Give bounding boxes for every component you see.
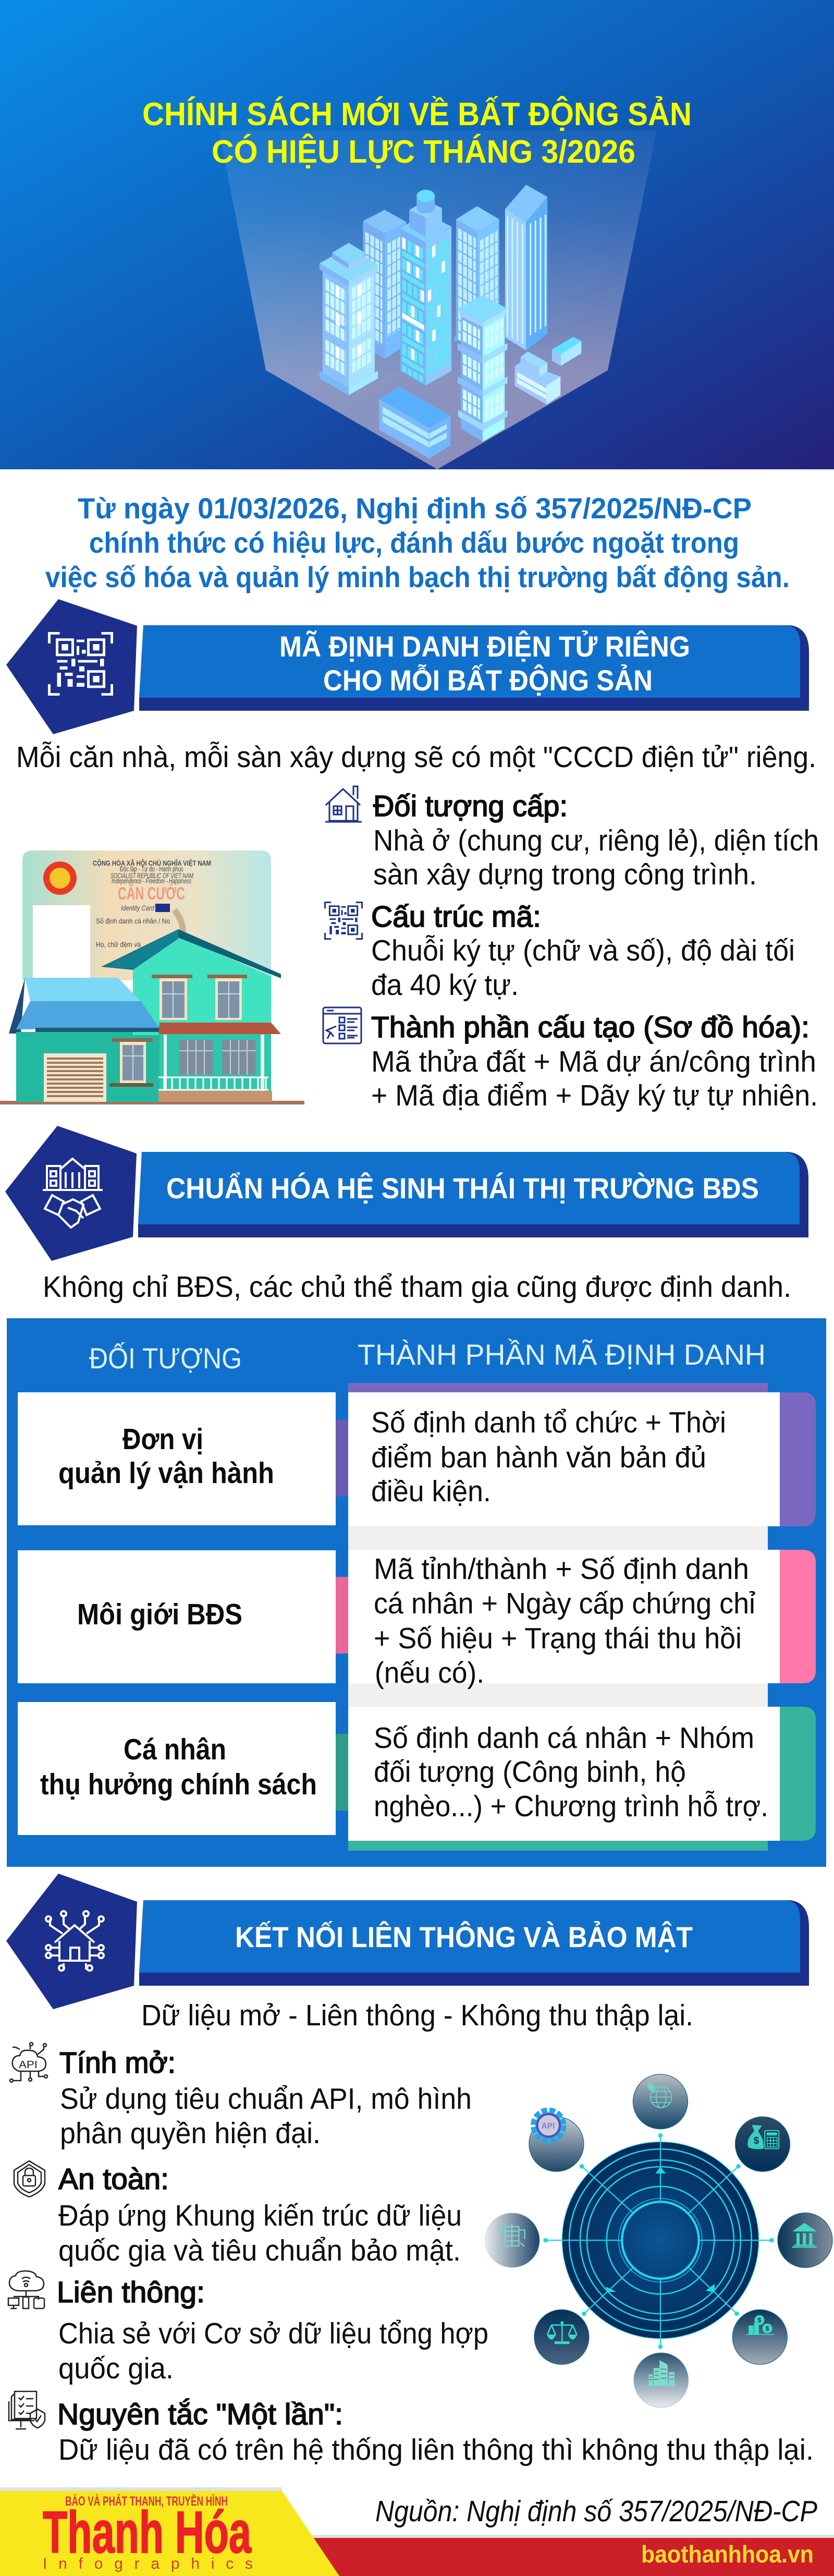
row: Đơn vị quản lý vận hành xyxy=(18,1383,816,1551)
row: Đơn vị quản lý vận hành: Đơn vị xyxy=(122,1423,203,1456)
diagram: data hub network xyxy=(485,2074,832,2408)
low block front xyxy=(379,387,450,458)
item: Nguyên tắc một lần xyxy=(9,2391,814,2466)
icon: API cloud: API xyxy=(19,2059,38,2071)
ID card: Independence - Freedom - Happiness xyxy=(112,877,191,885)
body text: Đáp ứng Khung kiến trúc dữ liệu xyxy=(58,2199,462,2232)
body text: Dữ liệu đã có trên hệ thống liên thông thì không thu thập lại. xyxy=(58,2433,814,2466)
title xyxy=(142,96,692,170)
house xyxy=(0,929,304,1104)
hub circle xyxy=(543,2133,774,2349)
node: money bag and calculator xyxy=(735,2117,790,2171)
section 1 badge xyxy=(6,599,137,734)
row: Cá nhân thụ hưởng chính sách: đối tượng (Công binh, hộ xyxy=(374,1755,686,1789)
item: Liên thông xyxy=(8,2271,488,2385)
node: bank xyxy=(778,2213,832,2268)
ID card: Họ, chữ đệm và xyxy=(96,940,141,949)
item: Đối tượng cấp xyxy=(325,786,819,891)
row: Môi giới BĐS: Mã tỉnh/thành + Số định danh xyxy=(374,1552,749,1586)
tower behind left xyxy=(363,210,407,359)
item: Cấu trúc mã xyxy=(325,900,795,1002)
heading: Liên thông: xyxy=(57,2276,205,2309)
section 1 heading xyxy=(279,630,690,697)
row: Cá nhân thụ hưởng chính sách: nghèo...) + Chương trình hỗ trợ. xyxy=(374,1790,768,1823)
item: Tính mở xyxy=(10,2043,472,2150)
icon: diagram window xyxy=(323,1007,361,1043)
ID card: Số định danh cá nhân / No xyxy=(96,917,170,925)
tower left xyxy=(320,243,378,395)
tower front xyxy=(458,295,508,442)
icon: cloud wifi devices xyxy=(8,2271,44,2308)
body text: đa 40 ký tự. xyxy=(371,968,519,1002)
row: Cá nhân thụ hưởng chính sách xyxy=(18,1702,816,1851)
body text: phân quyền hiện đại. xyxy=(60,2117,321,2150)
heading: Nguyên tắc "Một lần": xyxy=(57,2398,343,2431)
publisher tagline: BÁO VÀ PHÁT THANH, TRUYỀN HÌNH xyxy=(65,2494,228,2509)
section 3 heading: KẾT NỐI LIÊN THÔNG VÀ BẢO MẬT xyxy=(235,1921,693,1953)
table background xyxy=(7,1318,826,1867)
row: Đơn vị quản lý vận hành: điểm ban hành văn bản đủ xyxy=(371,1441,706,1474)
column header: subject: ĐỐI TƯỢNG xyxy=(89,1342,242,1375)
intro text xyxy=(45,492,790,593)
item: Thành phần cấu tạo xyxy=(323,1007,818,1112)
section 2 lead text: Không chỉ BĐS, các chủ thể tham gia cũng được định danh. xyxy=(43,1270,791,1304)
ID card: CỘNG HÒA XÃ HỘI CHỦ NGHĨA VIỆT NAM xyxy=(93,858,211,867)
intro text: Từ ngày 01/03/2026, Nghị định số 357/2025/NĐ-CP xyxy=(78,492,752,525)
row: Môi giới BĐS xyxy=(18,1550,816,1708)
body text: quốc gia và tiêu chuẩn bảo mật. xyxy=(58,2234,461,2267)
icon: building and handshake xyxy=(43,1159,103,1228)
footer red band xyxy=(313,2535,834,2576)
body text: quốc gia. xyxy=(58,2352,174,2385)
row: Môi giới BĐS: (nếu có). xyxy=(375,1656,484,1690)
ID card xyxy=(22,850,271,980)
body text xyxy=(58,2199,462,2267)
row: Môi giới BĐS: Môi giới BĐS xyxy=(77,1598,242,1631)
infographics label: Infographics xyxy=(43,2555,253,2572)
body text: sàn xây dựng trong công trình. xyxy=(373,858,757,891)
ID card: Độc lập - Tự do - Hạnh phúc xyxy=(120,865,183,873)
node: money bag and calculator: $ xyxy=(754,2135,759,2146)
section 1 header xyxy=(6,599,809,734)
icon: QR code xyxy=(49,633,112,695)
body text: + Mã địa điểm + Dãy ký tự tự nhiên. xyxy=(371,1079,818,1112)
tower right of centre xyxy=(454,206,499,350)
hero background xyxy=(0,0,834,469)
section 1 heading: MÃ ĐỊNH DANH ĐIỆN TỬ RIÊNG xyxy=(279,630,690,663)
row: Môi giới BĐS: + Số hiệu + Trạng thái thu hồi xyxy=(374,1622,742,1655)
row: Đơn vị quản lý vận hành: điều kiện. xyxy=(371,1475,491,1508)
body text: Sử dụng tiêu chuẩn API, mô hình xyxy=(60,2082,472,2116)
ID card: CĂN CƯỚC xyxy=(118,884,185,904)
publisher logo name: Thanh Hóa xyxy=(43,2499,252,2565)
node: globe xyxy=(633,2074,688,2129)
node: city xyxy=(634,2353,689,2408)
hero panel xyxy=(0,0,834,469)
icon: checklist monitor shield xyxy=(9,2391,45,2429)
heading: An toàn: xyxy=(58,2162,169,2196)
light beam xyxy=(219,130,657,469)
section 1 heading: CHO MỖI BẤT ĐỘNG SẢN xyxy=(323,664,653,697)
icon: smart home network xyxy=(46,1911,104,1971)
section 3 badge xyxy=(6,1874,137,2009)
node: API gear xyxy=(529,2110,584,2171)
heading: Cấu trúc mã: xyxy=(371,900,541,933)
website: baothanhhoa.vn xyxy=(641,2541,814,2568)
item: An toàn xyxy=(14,2161,462,2267)
icon: house outline xyxy=(325,786,362,822)
footer xyxy=(0,2487,834,2576)
body text: Chia sẻ với Cơ sở dữ liệu tổng hợp xyxy=(58,2317,488,2350)
node: scales xyxy=(534,2310,589,2364)
row: Đơn vị quản lý vận hành: quản lý vận hành xyxy=(58,1456,274,1490)
node: coins and buildings: $ xyxy=(757,2317,761,2324)
section 3 lead text: Dữ liệu mở - Liên thông - Không thu thập lại. xyxy=(141,1999,693,2032)
node: coins and buildings: $ xyxy=(766,2325,769,2332)
heading: Đối tượng cấp: xyxy=(373,789,568,823)
body text xyxy=(58,2317,488,2385)
tower centre with spire xyxy=(400,190,451,385)
footer grey edge xyxy=(0,2487,282,2492)
panel: identification table xyxy=(7,1318,826,1867)
row: Cá nhân thụ hưởng chính sách: Cá nhân xyxy=(124,1733,226,1766)
section 2 badge xyxy=(5,1126,137,1261)
tall tower with stripes xyxy=(505,185,547,350)
section 1 banner xyxy=(139,625,809,711)
heading: Tính mở: xyxy=(59,2046,176,2080)
icon: shield lock xyxy=(14,2161,45,2197)
icon: API cloud xyxy=(10,2043,47,2082)
small block right xyxy=(514,351,560,405)
illustration: isometric buildings xyxy=(320,185,581,458)
section 2 banner xyxy=(138,1152,808,1237)
body text: Mã thửa đất + Mã dự án/công trình xyxy=(371,1045,816,1078)
body text: Chuỗi ký tự (chữ và số), độ dài tối xyxy=(371,934,795,967)
node: coins and buildings xyxy=(732,2310,787,2364)
illustration: ID card and house xyxy=(0,850,304,1104)
body text xyxy=(371,934,795,1002)
row: Môi giới BĐS: cá nhân + Ngày cấp chứng chỉ xyxy=(374,1587,755,1620)
row: Cá nhân thụ hưởng chính sách: thụ hưởng chính sách xyxy=(40,1768,317,1801)
body text xyxy=(60,2082,472,2150)
ID card: Identity Card xyxy=(121,904,155,912)
intro text: chính thức có hiệu lực, đánh dấu bước ngoặt trong xyxy=(89,526,739,559)
section 2 heading: CHUẨN HÓA HỆ SINH THÁI THỊ TRƯỜNG BĐS xyxy=(166,1172,759,1205)
body text xyxy=(373,824,819,891)
section 2 header xyxy=(5,1126,808,1261)
intro text: việc số hóa và quản lý minh bạch thị trường bất động sản. xyxy=(45,561,790,593)
icon: QR code small xyxy=(325,902,362,939)
section 3 header xyxy=(6,1874,809,2009)
row: Đơn vị quản lý vận hành: Số định danh tổ chức + Thời xyxy=(371,1406,726,1439)
footer yellow logo panel xyxy=(0,2491,339,2576)
node: API gear: API xyxy=(541,2122,555,2131)
heading: Thành phần cấu tạo (Sơ đồ hóa): xyxy=(371,1011,810,1044)
section 3 banner xyxy=(139,1900,809,1986)
tiny block right xyxy=(552,337,581,366)
node: building exchange xyxy=(485,2213,539,2268)
row: Cá nhân thụ hưởng chính sách: Số định danh cá nhân + Nhóm xyxy=(374,1721,754,1755)
column header: code components: THÀNH PHẦN MÃ ĐỊNH DANH xyxy=(358,1338,766,1371)
title: CHÍNH SÁCH MỚI VỀ BẤT ĐỘNG SẢN xyxy=(142,96,692,132)
ID card: SOCIALIST REPUBLIC OF VIET NAM xyxy=(111,871,193,880)
body text xyxy=(371,1045,818,1112)
title: CÓ HIỆU LỰC THÁNG 3/2026 xyxy=(212,134,635,170)
